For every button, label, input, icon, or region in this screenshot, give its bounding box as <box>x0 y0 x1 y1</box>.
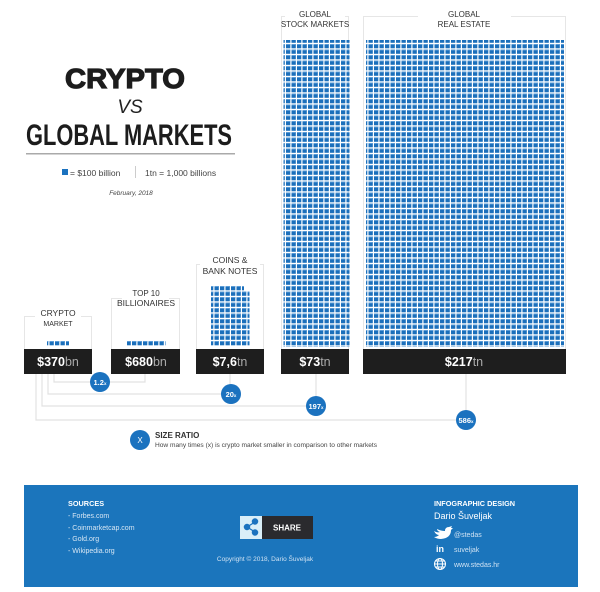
labels: GLOBAL <box>299 10 332 19</box>
footer: @stedas <box>454 532 482 539</box>
size ratio legend: X <box>137 436 143 445</box>
labels: TOP 10 <box>132 289 160 298</box>
footer: - Coinmarketcap.com <box>68 525 135 532</box>
labels: COINS & <box>213 255 248 265</box>
date: February, 2018 <box>109 190 153 197</box>
footer <box>24 485 578 587</box>
icon: linkedin: in <box>436 544 444 554</box>
ratio circles: 1.2x <box>94 378 107 387</box>
share button: SHARE <box>273 524 302 532</box>
ratio circles <box>90 372 476 430</box>
icon: twitter <box>434 526 453 539</box>
footer: SOURCES <box>68 499 104 508</box>
footer: - Wikipedia.org <box>68 548 115 555</box>
title <box>26 63 232 152</box>
footer: - Gold.org <box>68 536 99 543</box>
labels: BANK NOTES <box>203 266 258 276</box>
labels: REAL ESTATE <box>438 20 490 29</box>
connectors <box>36 374 466 420</box>
footer: Copyright © 2018, Dario Šuveljak <box>217 554 314 563</box>
frames <box>24 16 566 349</box>
icon: globe <box>434 558 446 570</box>
footer: suveljak <box>454 547 480 554</box>
value bars: $217tn <box>445 355 483 369</box>
share button <box>240 516 313 539</box>
title: GLOBAL MARKETS <box>26 119 232 152</box>
size ratio legend: How many times (x) is crypto market smaller in comparison to other markets <box>155 442 378 449</box>
value bars: $370bn <box>37 355 79 369</box>
value bars: $7,6tn <box>213 355 247 369</box>
labels <box>40 10 490 328</box>
labels: GLOBAL <box>448 10 481 19</box>
value bars: $73tn <box>299 355 331 369</box>
labels: BILLIONAIRES <box>117 298 175 308</box>
ratio circles: 20x <box>226 390 237 399</box>
value bars <box>24 349 566 374</box>
footer: www.stedas.hr <box>453 562 500 569</box>
title: CRYPTO <box>65 63 185 94</box>
legend: 1tn = 1,000 billions <box>145 168 216 178</box>
title: VS <box>117 97 143 118</box>
legend: = $100 billion <box>70 168 121 178</box>
ratio circles: 586x <box>458 416 474 425</box>
footer: Dario Šuveljak <box>434 511 493 521</box>
footer: - Forbes.com <box>68 513 109 520</box>
ratio circles: 197x <box>308 402 324 411</box>
footer: INFOGRAPHIC DESIGN <box>434 499 515 508</box>
legend <box>62 166 216 178</box>
labels: CRYPTO <box>40 308 76 318</box>
labels: STOCK MARKETS <box>281 20 349 29</box>
labels: MARKET <box>43 321 73 328</box>
size ratio legend <box>130 430 378 450</box>
size ratio legend: SIZE RATIO <box>155 431 199 440</box>
grids <box>47 341 69 346</box>
value bars: $680bn <box>125 355 167 369</box>
